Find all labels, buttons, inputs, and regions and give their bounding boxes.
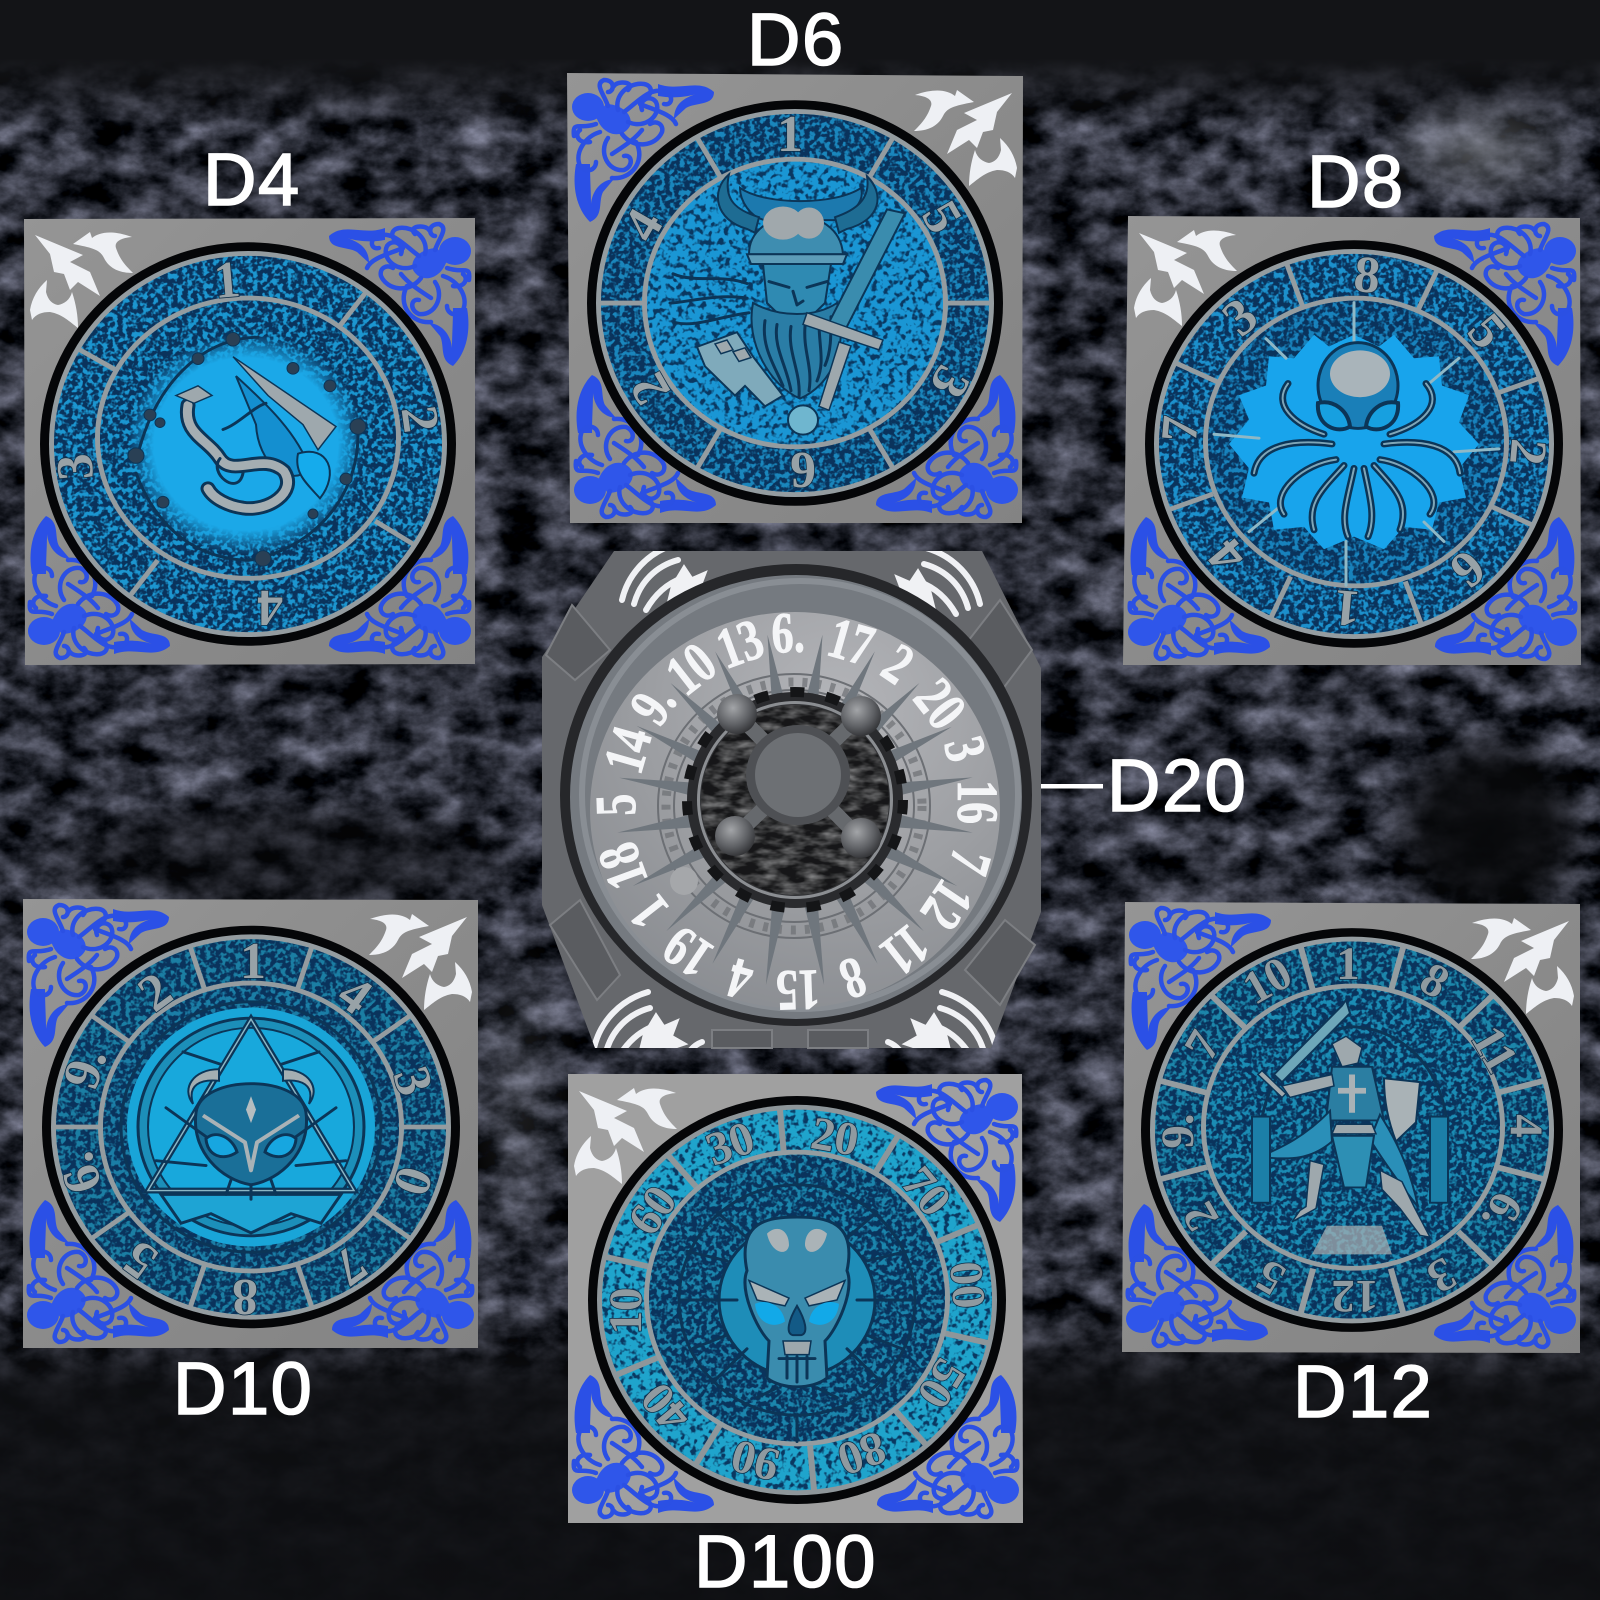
D12 blue ornament bottom left	[1126, 1204, 1268, 1346]
D8 blue ornament bottom left	[1128, 517, 1270, 659]
D20 radial spikes	[616, 634, 974, 986]
D20 numbers: 6.	[770, 601, 806, 666]
D10 dial numbers: 4	[327, 965, 382, 1026]
D10 dial numbers: 2	[128, 962, 183, 1023]
D4 blue ornament bottom left	[28, 516, 170, 658]
D10 dial numbers	[47, 933, 444, 1325]
D20 numbers: 9.	[618, 673, 689, 736]
D100 dial numbers: 10	[600, 1288, 652, 1334]
D10 dial numbers: 8	[232, 1268, 258, 1325]
D6 dial numbers: 3	[918, 356, 981, 407]
panel: D100 coin	[568, 1074, 1023, 1523]
D20 corner bat ornaments	[594, 544, 996, 1082]
D20 numbers: 8	[832, 944, 874, 1012]
D10 dial numbers: 5	[113, 1229, 168, 1290]
D20 numbers: 3	[931, 730, 998, 768]
D4 dial numbers: 3	[46, 452, 105, 482]
D12 dial numbers: 12	[1332, 1270, 1378, 1322]
D100 dial numbers: 40	[631, 1373, 701, 1442]
panel: D12 coin	[1122, 902, 1580, 1353]
D20 numbers: 20	[901, 667, 979, 741]
D10 blue ornament top left	[27, 905, 169, 1047]
D100 dial numbers: 70	[891, 1157, 961, 1226]
D4 blue ornament bottom right	[329, 516, 471, 658]
D20 numbers: 4	[721, 945, 760, 1012]
heading: D10: D10	[173, 1347, 313, 1430]
viking art	[670, 174, 905, 435]
D100 blue ornament top right	[876, 1080, 1018, 1222]
dragon art	[128, 332, 366, 566]
heading: D20: D20	[1107, 744, 1247, 827]
heading: D4: D4	[203, 138, 301, 221]
D12 dial numbers: 11	[1461, 1017, 1528, 1082]
D10 dial numbers: 3	[381, 1060, 444, 1102]
D4 dial numbers: 2	[389, 402, 450, 436]
D8 plate	[1123, 216, 1581, 665]
D20 bezel	[542, 551, 1041, 1048]
D20 numbers: 13	[708, 607, 772, 682]
D8 dial numbers: 5	[1456, 303, 1517, 360]
heading: D8: D8	[1307, 140, 1405, 223]
D4 white ornament	[30, 232, 133, 328]
D4 plate	[24, 218, 475, 665]
D4 blue ornament top right	[329, 224, 471, 366]
D8 dial numbers: 3	[1212, 287, 1269, 348]
D100 blue ornament bottom right	[877, 1375, 1019, 1517]
D20 numbers: 10	[654, 630, 728, 708]
D12 plate	[1122, 902, 1580, 1353]
D8 dial numbers: 8	[1352, 246, 1382, 305]
D20 steel balls	[670, 694, 881, 895]
D10 dial numbers: 7	[322, 1235, 377, 1296]
D12 dial numbers: 3	[1418, 1247, 1465, 1304]
D10 dial numbers: 9.	[52, 1041, 119, 1096]
D100 dial numbers: 60	[618, 1176, 688, 1245]
D100 dial numbers: 00	[939, 1259, 995, 1311]
D6 plate	[567, 73, 1023, 523]
D20 numbers: 12	[908, 869, 986, 941]
D100 dial numbers: 30	[699, 1111, 761, 1176]
D100 dial numbers: 50	[907, 1350, 976, 1417]
panel: D8 coin	[1123, 216, 1581, 665]
panel: D10 coin	[23, 899, 478, 1348]
D6 dial numbers	[612, 106, 981, 498]
D8 blue ornament top right	[1434, 224, 1576, 366]
cthulhu art	[1214, 303, 1499, 585]
panel: D4 coin	[24, 218, 475, 665]
D20 inner triangle band	[658, 674, 930, 938]
D100 coin disc	[588, 1096, 1006, 1504]
D100 plate	[568, 1074, 1023, 1523]
owl and triangle art	[121, 1002, 381, 1252]
D100 dial numbers: 20	[807, 1107, 862, 1167]
D4 dial numbers: 4	[257, 579, 283, 636]
D12 dial numbers: 4	[1500, 1114, 1552, 1138]
D20 numbers: 11	[869, 912, 941, 988]
D10 dial numbers: 6.	[47, 1145, 114, 1200]
D100 blue ornament bottom left	[572, 1375, 714, 1517]
heading: D12: D12	[1293, 1350, 1433, 1433]
D12 white ornament	[1471, 918, 1574, 1014]
D6 dial numbers: 6	[790, 441, 816, 498]
D20 bezel inserts	[546, 600, 1035, 1048]
D20 numbers: 1	[617, 883, 681, 940]
D6 blue ornament top left	[572, 80, 714, 222]
D10 blue ornament bottom right	[332, 1200, 474, 1342]
D8 dial numbers: 2	[1498, 437, 1557, 467]
D12 dial numbers: 9.	[1152, 1113, 1204, 1149]
D10 dial numbers: 0	[381, 1160, 444, 1202]
D100 dial numbers	[600, 1107, 995, 1491]
D8 dial numbers: 4	[1197, 527, 1258, 584]
D6 dial numbers: 1	[777, 106, 803, 163]
knight art	[1252, 1000, 1448, 1254]
D8 blue ornament bottom right	[1435, 517, 1577, 659]
D10 plate	[23, 899, 478, 1348]
D12 dial numbers: 6.	[1471, 1183, 1533, 1240]
D20 numbers: 15	[775, 957, 821, 1022]
D6 dial numbers: 4	[612, 200, 675, 251]
D10 coin disc	[42, 926, 460, 1328]
D12 dial numbers: 8	[1411, 952, 1458, 1009]
D12 dial numbers: 7	[1174, 1022, 1231, 1069]
D10 dial numbers: 1	[240, 933, 266, 990]
D10 white ornament	[369, 914, 472, 1010]
D20 numbers: 5	[584, 793, 649, 817]
D20 numbers: 16	[944, 780, 1009, 824]
D8 white ornament	[1134, 230, 1237, 326]
D100 white ornament	[574, 1088, 677, 1184]
heading: D6: D6	[747, 0, 845, 81]
D20 numbers: 2	[871, 632, 925, 697]
D100 dial numbers: 90	[726, 1429, 785, 1491]
D8 dial numbers	[1151, 246, 1557, 637]
D10 blue ornament bottom left	[27, 1200, 169, 1342]
D12 blue ornament bottom right	[1434, 1205, 1576, 1347]
D8 dial numbers: 6	[1439, 538, 1496, 599]
D100 dial numbers: 80	[831, 1421, 893, 1486]
D12 dial numbers: 5	[1247, 1249, 1294, 1306]
D6 dial numbers: 2	[619, 363, 682, 414]
skull art	[679, 1158, 915, 1442]
D12 dial numbers: 2	[1172, 1193, 1229, 1240]
D20 dial	[590, 612, 1000, 1008]
D8 dial numbers: 7	[1151, 414, 1210, 444]
D4 dial numbers	[46, 251, 450, 636]
panel: D6 coin	[567, 73, 1023, 523]
panel: D20 watch-style roller	[542, 544, 1041, 1082]
D6 dial numbers: 5	[910, 192, 973, 243]
D8 coin disc	[1145, 240, 1563, 648]
D20 numbers: 19	[652, 913, 724, 991]
D12 dial numbers	[1152, 938, 1552, 1322]
D6 coin disc	[587, 100, 1003, 506]
D4 dial numbers: 1	[212, 251, 242, 310]
D12 coin disc	[1141, 928, 1563, 1332]
D20 numbers: 18	[586, 834, 661, 898]
D20 hub	[687, 692, 903, 908]
D12 dial numbers: 1	[1336, 938, 1360, 990]
D8 dial numbers: 1	[1332, 578, 1362, 637]
D20 glass ring	[560, 564, 1032, 1026]
D6 blue ornament bottom right	[876, 375, 1018, 517]
D20 numbers: 7	[936, 842, 1003, 881]
D20 leader line	[1041, 784, 1103, 788]
D6 white ornament	[914, 90, 1017, 186]
D20 numbers	[584, 601, 1009, 1022]
D4 coin disc	[40, 242, 456, 646]
D12 dial numbers: 10	[1234, 947, 1301, 1015]
D12 blue ornament top left	[1129, 908, 1271, 1050]
D20 numbers: 17	[821, 605, 881, 679]
D6 blue ornament bottom left	[574, 375, 716, 517]
D20 numbers: 14	[591, 720, 665, 780]
